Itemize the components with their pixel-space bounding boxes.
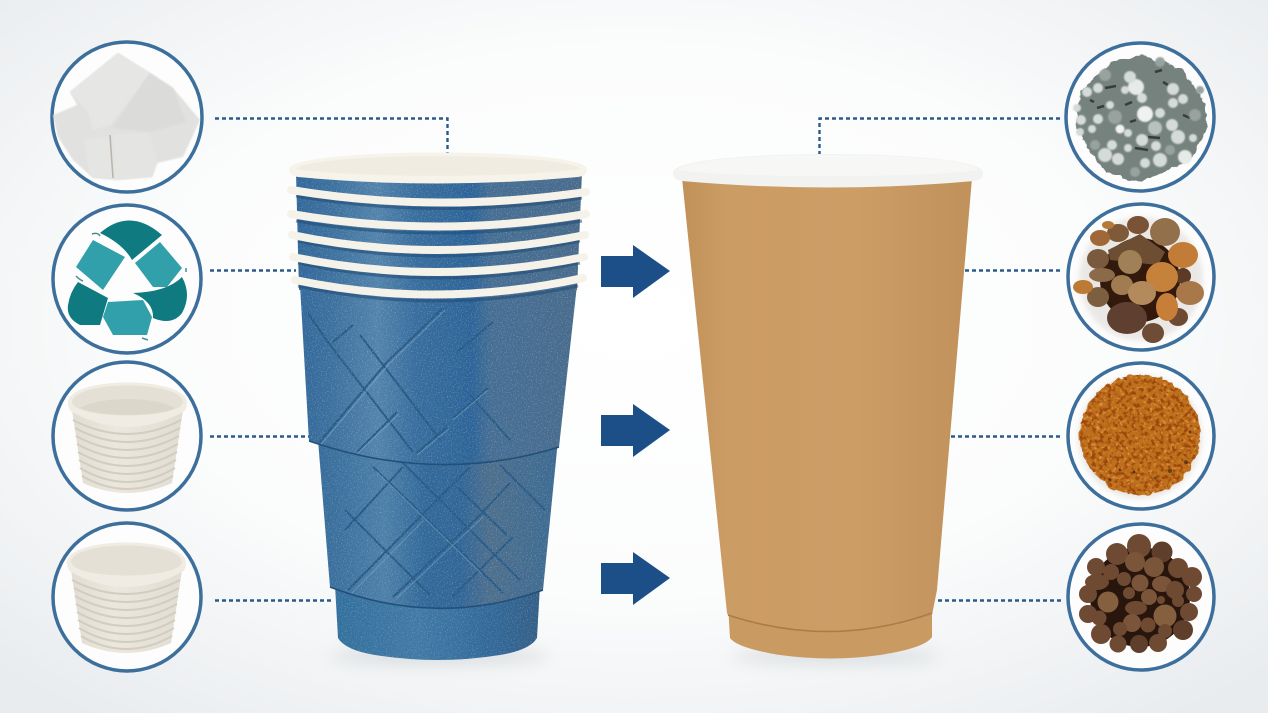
cup shadow bbox=[330, 647, 550, 665]
icon: white mineral chunk bbox=[52, 42, 202, 192]
top rim bbox=[289, 152, 587, 184]
icon: gray granules bbox=[1066, 43, 1214, 191]
connector lines bbox=[210, 118, 1062, 600]
icon: recycling symbol bbox=[53, 205, 201, 353]
left cup stack bbox=[289, 152, 587, 665]
icon: white ribbed tub 1 bbox=[53, 362, 201, 510]
middle section of blue cup bbox=[318, 440, 558, 608]
stacked rims bbox=[289, 152, 587, 301]
cup shadow bbox=[730, 648, 940, 664]
arrow 2 bbox=[601, 404, 670, 457]
icon: white ribbed tub 2 bbox=[53, 523, 201, 671]
upper section of blue cup bbox=[300, 285, 577, 465]
bottom section of blue cup bbox=[335, 585, 540, 660]
right kraft cup bbox=[673, 154, 983, 664]
cup body bbox=[682, 178, 972, 632]
icon: dark brown seeds bbox=[1068, 524, 1214, 670]
icon: orange fibrous powder bbox=[1068, 363, 1214, 509]
arrow 3 bbox=[601, 552, 670, 605]
cup base bbox=[728, 605, 932, 658]
arrow 1 bbox=[601, 245, 670, 298]
icon: brown nuts bbox=[1068, 204, 1214, 350]
cup rim bbox=[673, 154, 983, 188]
